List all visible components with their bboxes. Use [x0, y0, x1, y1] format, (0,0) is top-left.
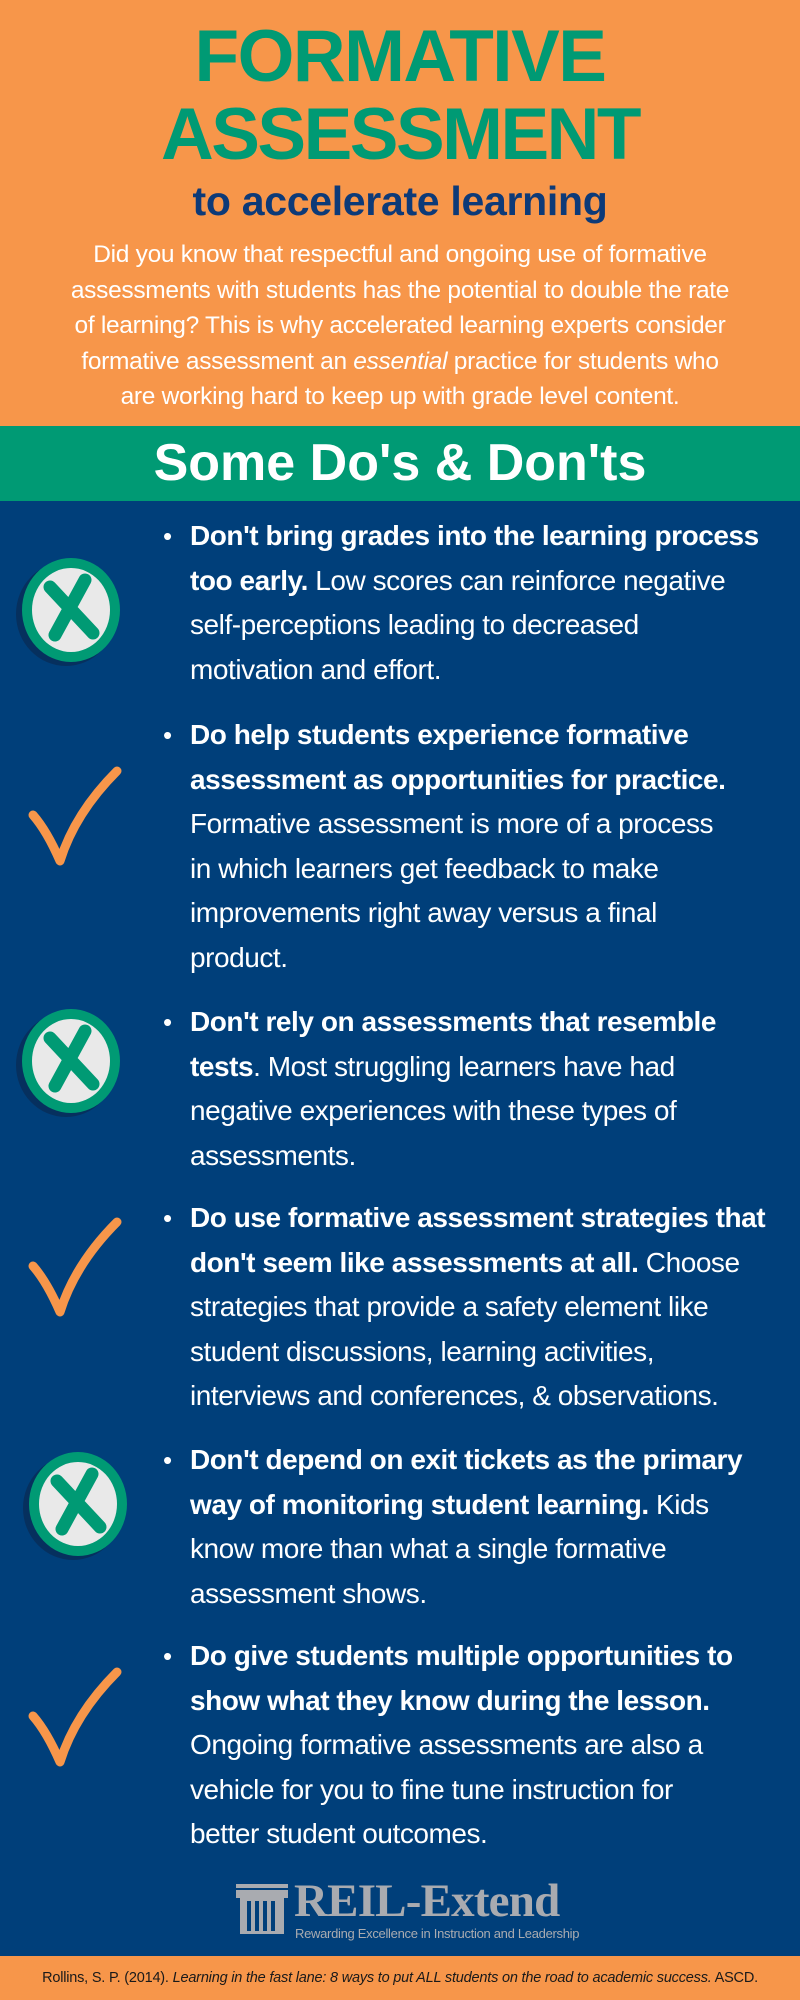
title: assessment: ASSESSMENT — [161, 94, 639, 175]
text: show what they know during the lesson. — [190, 1684, 710, 1716]
text: Don't bring grades into the learning process — [190, 520, 759, 551]
subtitle: to accelerate learning — [192, 178, 607, 224]
icon: x circle — [16, 558, 120, 666]
text: too early. Low scores can reinforce negative — [190, 564, 725, 596]
intro paragraph: are working hard to keep up with grade level content. — [121, 383, 679, 410]
icon: check — [28, 1668, 122, 1766]
text: vehicle for you to fine tune instruction for — [190, 1774, 673, 1804]
text: • — [163, 1641, 172, 1671]
text: Do use formative assessment strategies that — [190, 1202, 765, 1233]
text: negative experiences with these types of — [190, 1095, 676, 1126]
item 6 — [28, 1640, 733, 1849]
icon: column — [236, 1884, 288, 1934]
text: better student outcomes. — [190, 1818, 487, 1849]
logo: REIL-Extend: Rewarding Excellence in Instruction and Leadership — [295, 1926, 579, 1941]
intro paragraph: of learning? This is why accelerated learning experts consider — [74, 312, 725, 339]
text: know more than what a single formative — [190, 1533, 666, 1564]
text: Don't rely on assessments that resemble — [190, 1006, 716, 1037]
text: self-perceptions leading to decreased — [190, 609, 639, 640]
text: • — [163, 1007, 172, 1037]
intro paragraph: formative assessment an essential practice for students who — [81, 348, 719, 374]
text: don't seem like assessments at all. Choose — [190, 1246, 740, 1278]
icon: check — [28, 766, 122, 866]
logo: REIL-Extend: REIL-Extend — [294, 1875, 559, 1927]
header panel — [0, 0, 800, 426]
item 2 — [28, 719, 726, 973]
icon: x circle — [23, 1452, 127, 1560]
text: way of monitoring student learning. Kids — [190, 1488, 709, 1520]
text: Do help students experience formative — [190, 719, 688, 750]
text: tests. Most struggling learners have had — [190, 1050, 675, 1082]
text: strategies that provide a safety element like — [190, 1291, 708, 1322]
item 3 — [16, 1006, 716, 1170]
section heading band — [0, 426, 800, 501]
intro paragraph: assessments with students has the potential to double the rate — [71, 276, 729, 304]
item 1 — [16, 520, 759, 684]
text: Ongoing formative assessments are also a — [190, 1729, 703, 1760]
footer citation: Rollins, S. P. (2014). Learning in the fast lane: 8 ways to put ALL students on the road to academic success. ASCD. — [42, 1970, 758, 1986]
text: assessment shows. — [190, 1578, 427, 1608]
text: • — [163, 1203, 172, 1233]
text: student discussions, learning activities, — [190, 1336, 654, 1366]
footer citation — [0, 1956, 800, 2000]
text: • — [163, 1445, 172, 1475]
text: assessments. — [190, 1140, 356, 1170]
text: assessment as opportunities for practice. — [190, 764, 726, 794]
text: Formative assessment is more of a process — [190, 808, 713, 839]
text: Do give students multiple opportunities to — [190, 1640, 733, 1671]
title: formative: FORMATIVE — [195, 16, 605, 97]
section heading band: Some Do's & Don'ts — [154, 434, 646, 492]
item 5 — [23, 1444, 742, 1608]
logo: REIL-Extend — [236, 1875, 579, 1941]
text: improvements right away versus a final — [190, 897, 657, 928]
text: Don't depend on exit tickets as the primary — [190, 1444, 742, 1475]
text: product. — [190, 942, 288, 972]
text: motivation and effort. — [190, 654, 441, 684]
intro paragraph — [71, 241, 729, 410]
text: in which learners get feedback to make — [190, 852, 658, 884]
intro paragraph: Did you know that respectful and ongoing use of formative — [93, 241, 707, 268]
icon: x circle — [16, 1009, 120, 1117]
text: • — [163, 720, 172, 750]
text: interviews and conferences, & observations. — [190, 1380, 718, 1411]
item 4 — [28, 1202, 766, 1411]
text: • — [163, 521, 172, 551]
icon: check — [28, 1218, 122, 1316]
